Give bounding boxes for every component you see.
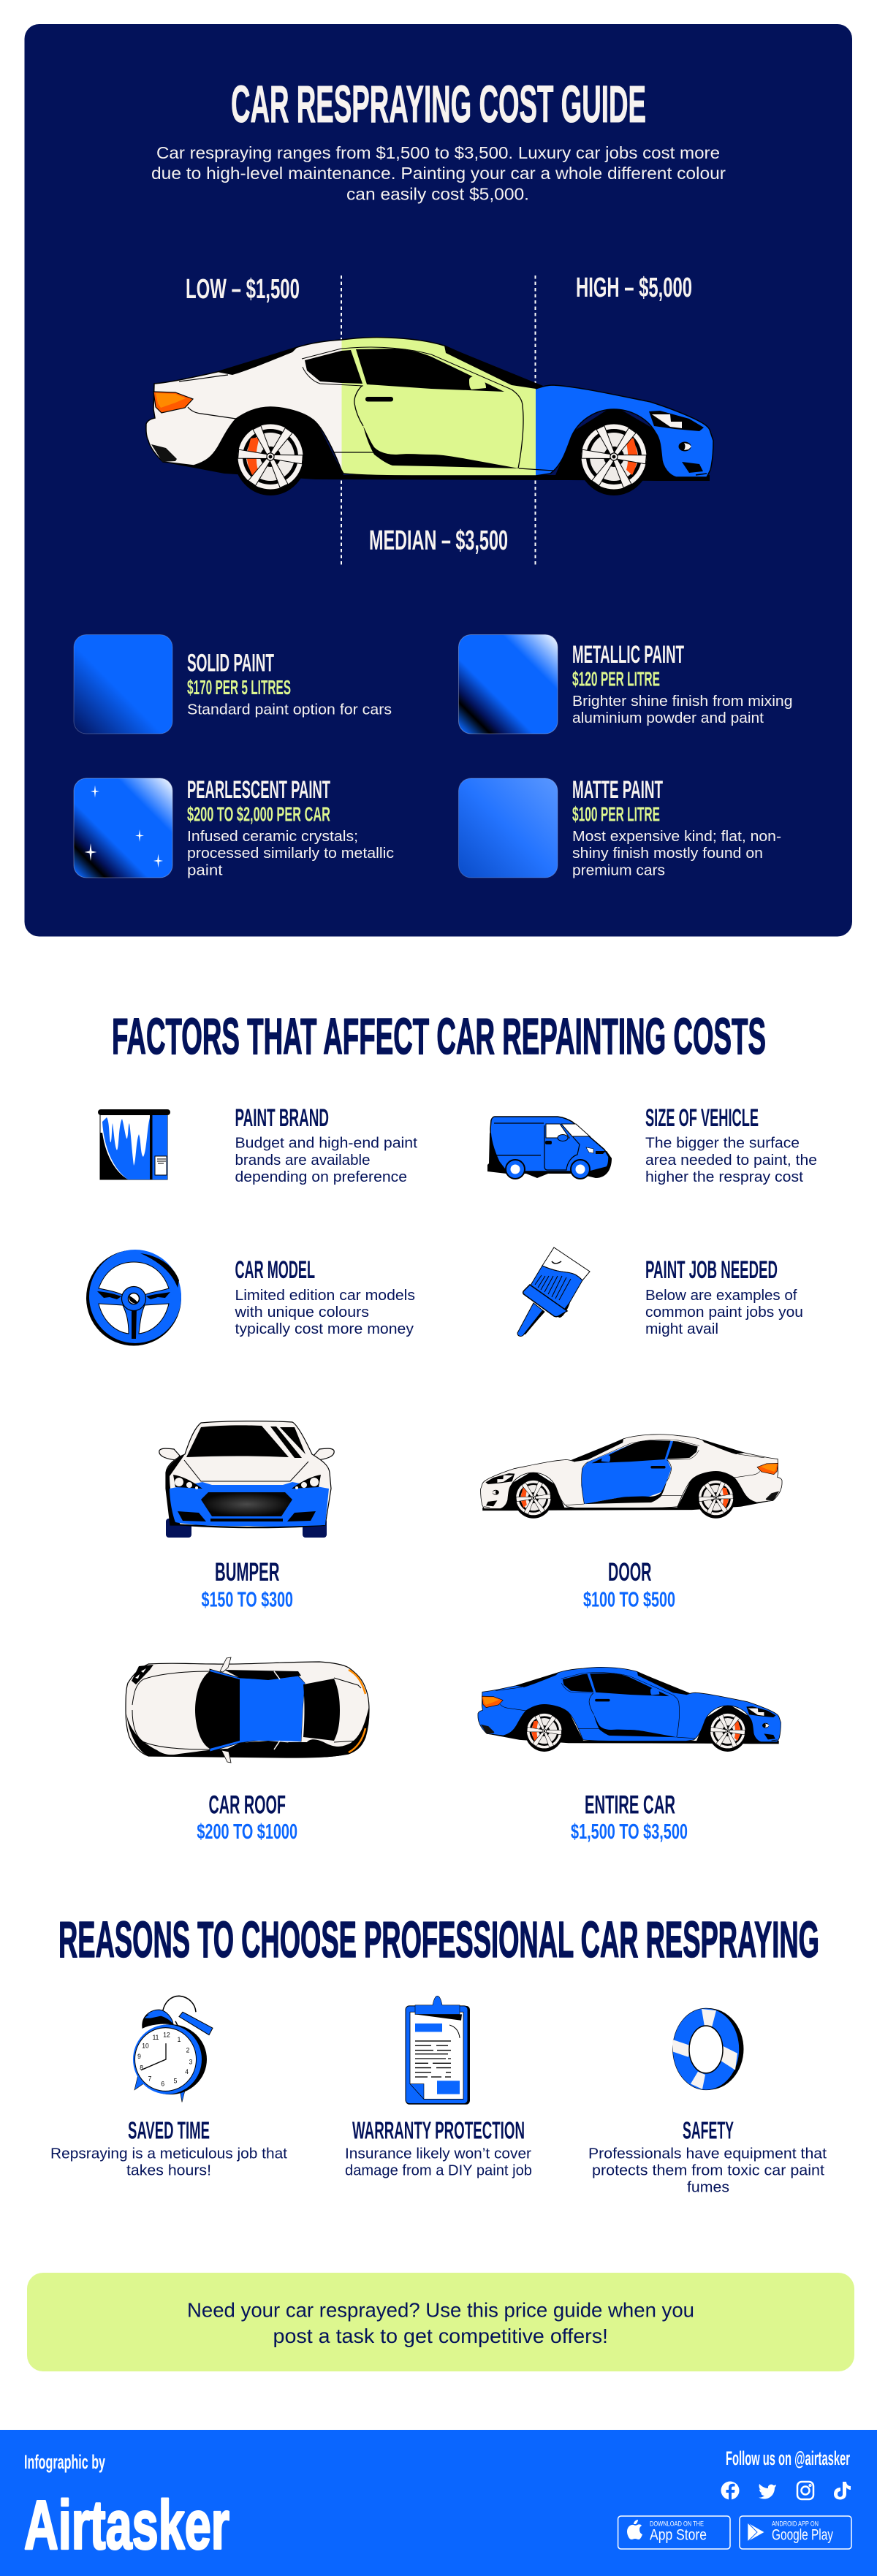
paint job: bumper: BUMPER (215, 1558, 279, 1587)
intro text: Car respraying ranges from $1,500 to $3,500. Luxury car jobs cost more (156, 143, 720, 162)
swatch: pearlescent (74, 778, 172, 878)
reason: safety (588, 2008, 827, 2195)
intro text: can easily cost $5,000. (346, 184, 529, 203)
swatch: matte (459, 778, 558, 878)
paint type: pearlescent: PEARLESCENT PAINT (187, 776, 330, 804)
reason: safety: protects them from toxic car paint (592, 2162, 824, 2179)
label: median price: MEDIAN – $3,500 (369, 525, 508, 556)
factor: size of vehicle: SIZE OF VEHICLE (645, 1104, 759, 1132)
logo: Airtasker: Airtasker (24, 2486, 229, 2564)
paint job: door (481, 1435, 782, 1612)
paint type: metallic: $120 PER LITRE (572, 668, 660, 690)
paint job: car roof: CAR ROOF (209, 1791, 286, 1820)
panel: cost guide (25, 24, 852, 937)
button: Google Play (740, 2516, 851, 2549)
icon: alarm clock: 6 (161, 2080, 164, 2088)
illustration: front of car (159, 1421, 334, 1538)
icon: alarm clock: 4 (185, 2068, 189, 2075)
callout: post a task (27, 2273, 854, 2371)
icon: facebook (721, 2482, 740, 2499)
reason: warranty protection: WARRANTY PROTECTION (352, 2116, 525, 2144)
paint job: entire car (478, 1667, 781, 1844)
swatch: metallic (459, 634, 558, 734)
price range dividers (341, 276, 535, 566)
button: App Store (618, 2516, 730, 2549)
paint type: metallic: METALLIC PAINT (572, 641, 684, 669)
paint job: door: $100 TO $500 (583, 1589, 675, 1612)
factor: paint job needed: common paint jobs you (645, 1304, 803, 1321)
icon: alarm clock: 12 (163, 2032, 170, 2039)
factor: size of vehicle (487, 1104, 817, 1185)
icon: alarm clock (133, 1996, 213, 2102)
factor: car model: Limited edition car models (235, 1288, 415, 1304)
icon: alarm clock: 10 (142, 2042, 149, 2049)
factor: paint job needed: might avail (645, 1321, 718, 1337)
footer credit: Infographic by (24, 2451, 105, 2473)
icon: paint can (98, 1109, 170, 1179)
factor: paint brand: depending on preference (235, 1169, 407, 1185)
icon: paint brush (517, 1247, 590, 1336)
factor: car model: typically cost more money (235, 1321, 414, 1337)
illustration: car from above (126, 1657, 369, 1763)
label: high price: HIGH – $5,000 (576, 273, 692, 303)
paint type: matte: $100 PER LITRE (572, 802, 660, 826)
reason: safety: SAFETY (683, 2116, 734, 2144)
reason: safety: fumes (687, 2178, 729, 2195)
factor: car model: CAR MODEL (235, 1256, 315, 1284)
factor: paint brand: PAINT BRAND (235, 1104, 329, 1132)
icon: alarm clock: 5 (174, 2077, 178, 2085)
icon: alarm clock: 2 (186, 2046, 190, 2054)
icon: alarm clock: 1 (178, 2036, 181, 2043)
paint type: matte (459, 776, 781, 878)
reason: saved time: takes hours! (126, 2162, 211, 2179)
icon: alarm clock: 7 (148, 2075, 152, 2082)
icon: alarm clock: 8 (140, 2064, 143, 2072)
illustration: car with blue door (481, 1435, 782, 1519)
callout: post a task: Need your car resprayed? Use this price guide when you (187, 2299, 694, 2322)
paint type: solid: $170 PER 5 LITRES (187, 676, 291, 699)
paint type: matte: shiny finish mostly found on (572, 846, 763, 862)
intro text (151, 143, 726, 203)
factor: paint job needed (517, 1247, 803, 1337)
footer (0, 2430, 877, 2576)
paint type: matte: Most expensive kind; flat, non- (572, 829, 781, 845)
factor: size of vehicle: higher the respray cost (645, 1169, 803, 1185)
reason: warranty protection (345, 1996, 532, 2179)
factor: paint brand: Budget and high-end paint (235, 1136, 417, 1152)
paint job: car roof: $200 TO $1000 (197, 1820, 297, 1844)
paint job: entire car: $1,500 TO $3,500 (571, 1820, 688, 1844)
reason: warranty protection: damage from a DIY paint job (345, 2162, 532, 2179)
paint type: pearlescent: processed similarly to metallic (187, 846, 394, 862)
paint type: pearlescent (74, 776, 394, 878)
paint job: bumper: $150 TO $300 (202, 1589, 293, 1612)
icon: twitter (759, 2484, 776, 2499)
paint job: door: DOOR (608, 1558, 652, 1587)
icon: life ring (672, 2008, 744, 2090)
factor: size of vehicle: area needed to paint, the (645, 1152, 817, 1169)
paint type: matte: premium cars (572, 862, 665, 878)
paint job: bumper (159, 1421, 334, 1612)
icon: tiktok (834, 2482, 851, 2499)
factor: paint job needed: Below are examples of (645, 1288, 797, 1304)
factor: paint brand (98, 1104, 417, 1185)
icon: steering wheel (86, 1250, 181, 1346)
icon: van (487, 1117, 612, 1179)
paint type: metallic (459, 634, 792, 734)
factor: car model: with unique colours (234, 1304, 369, 1321)
icon: instagram (797, 2482, 813, 2499)
callout: post a task: post a task to get competitive offers! (273, 2325, 608, 2347)
reason: saved time: SAVED TIME (128, 2116, 210, 2144)
illustration: fully blue car (478, 1667, 781, 1752)
paint type: pearlescent: Infused ceramic crystals; (187, 829, 358, 845)
factor: size of vehicle: The bigger the surface (645, 1136, 800, 1152)
button: App Store: DOWNLOAD ON THE (650, 2520, 704, 2528)
paint job: car roof (126, 1657, 369, 1844)
paint type: solid (74, 634, 392, 734)
label: low price: LOW – $1,500 (186, 274, 300, 305)
button: Google Play: Google Play (772, 2527, 833, 2544)
button: Google Play: ANDROID APP ON (772, 2520, 819, 2528)
paint type: metallic: aluminium powder and paint (572, 710, 764, 726)
button: App Store: App Store (650, 2527, 707, 2544)
paint type: solid: Standard paint option for cars (187, 702, 392, 718)
paint type: pearlescent: paint (187, 862, 223, 878)
paint job: entire car: ENTIRE CAR (585, 1791, 675, 1820)
reason: saved time: Repsraying is a meticulous job that (50, 2145, 287, 2162)
illustration: three-colour car (146, 338, 713, 495)
icon: alarm clock: 9 (137, 2053, 141, 2060)
icon: alarm clock: 11 (153, 2034, 159, 2041)
paint type: pearlescent: $200 TO $2,000 PER CAR (187, 802, 330, 826)
reason: saved time (50, 1996, 287, 2179)
swatch: solid (74, 634, 172, 734)
paint type: matte: MATTE PAINT (572, 776, 663, 804)
reason: warranty protection: Insurance likely won’t cover (345, 2145, 531, 2162)
icon: alarm clock: 3 (189, 2058, 193, 2065)
factor: paint brand: brands are available (235, 1152, 370, 1169)
reason: safety: Professionals have equipment that (588, 2145, 827, 2162)
factor: car model (86, 1250, 415, 1346)
icon: clipboard (406, 1996, 470, 2105)
paint type: solid: SOLID PAINT (187, 649, 274, 677)
paint type: metallic: Brighter shine finish from mixing (572, 694, 792, 710)
intro text: due to high-level maintenance. Painting your car a whole different colour (151, 164, 726, 183)
